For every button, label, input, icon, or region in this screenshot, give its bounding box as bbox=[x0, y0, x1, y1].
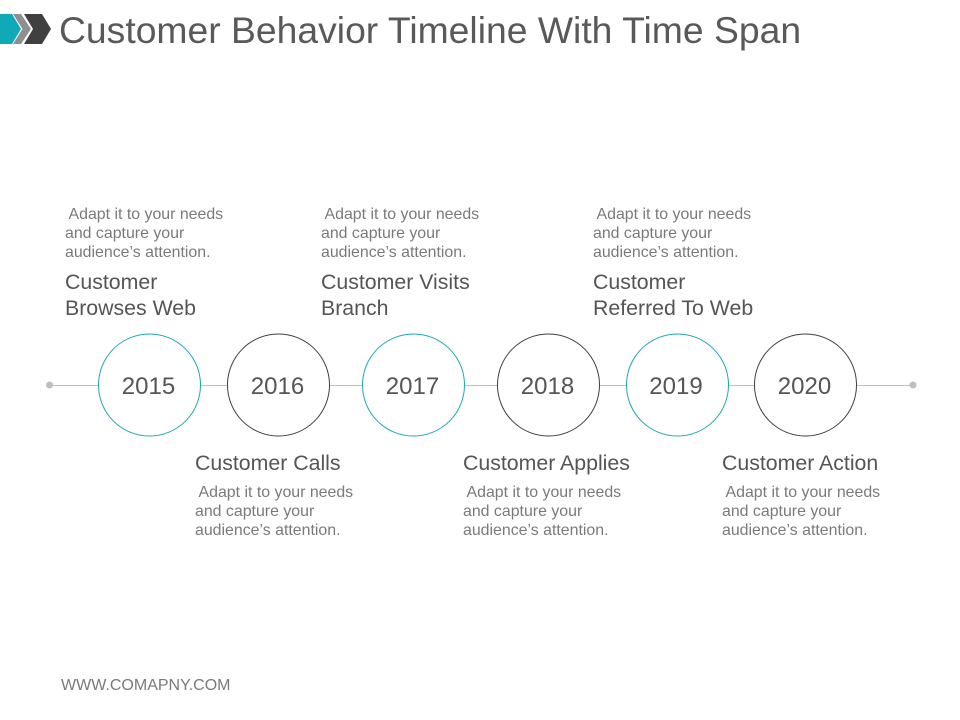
circle 2017 bbox=[362, 334, 464, 436]
heading: Customer Referred To Web: Customer Referred To Web bbox=[593, 270, 753, 320]
text: 2016 description: Adapt it to your needs and capture your audience’s attention. bbox=[195, 484, 353, 539]
circle 2015 bbox=[98, 334, 200, 436]
circle 2017: 2017 bbox=[386, 373, 439, 400]
heading: Customer Visits Branch: Customer Visits Branch bbox=[321, 270, 470, 320]
text: 2015 description: Adapt it to your needs and capture your audience’s attention. bbox=[65, 206, 223, 261]
circle 2018: 2018 bbox=[521, 373, 574, 400]
circle 2015: 2015 bbox=[122, 373, 175, 400]
footer url: WWW.COMAPNY.COM bbox=[61, 677, 230, 694]
text: 2019 description: Adapt it to your needs and capture your audience’s attention. bbox=[593, 206, 751, 261]
circle 2016: 2016 bbox=[251, 373, 304, 400]
start dot bbox=[46, 382, 53, 388]
circle 2018 bbox=[498, 334, 600, 436]
circle 2019 bbox=[626, 334, 728, 436]
circle 2020: 2020 bbox=[778, 373, 831, 400]
circle 2019: 2019 bbox=[649, 373, 703, 400]
heading: Customer Calls: Customer Calls bbox=[195, 451, 341, 475]
text: 2020 description: Adapt it to your needs and capture your audience’s attention. bbox=[722, 484, 880, 539]
circle 2020 bbox=[754, 334, 856, 436]
heading: Customer Browses Web: Customer Browses Web bbox=[65, 270, 196, 320]
heading: Customer Action: Customer Action bbox=[722, 451, 878, 475]
text: 2018 description: Adapt it to your needs and capture your audience’s attention. bbox=[463, 484, 621, 539]
icon: header chevrons bbox=[0, 14, 51, 44]
heading: Customer Applies: Customer Applies bbox=[463, 451, 630, 475]
title: Customer Behavior Timeline With Time Span bbox=[59, 9, 801, 51]
end dot bbox=[910, 382, 916, 388]
circle 2016 bbox=[228, 334, 330, 436]
text: 2017 description: Adapt it to your needs and capture your audience’s attention. bbox=[321, 206, 479, 261]
